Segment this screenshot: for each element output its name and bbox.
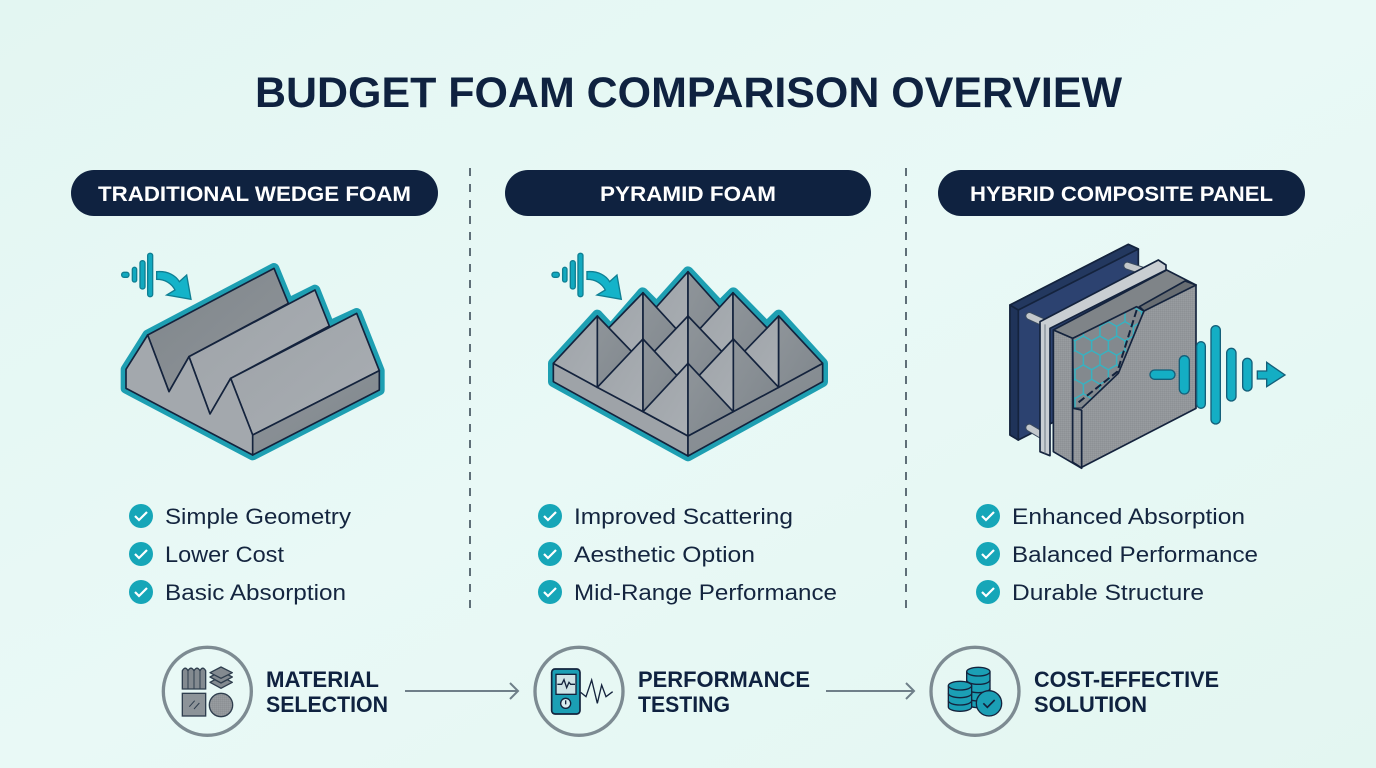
feature: balanced performance: Balanced Performance <box>1012 542 1258 567</box>
heading pill: hybrid composite panel: HYBRID COMPOSITE PANEL <box>970 183 1273 206</box>
feature: basic absorption: Basic Absorption <box>165 580 346 605</box>
panel: traditional wedge foam <box>71 170 438 605</box>
label: cost-effective solution <box>1034 667 1219 717</box>
label: cost-effective solution: COST-EFFECTIVE <box>1034 667 1219 692</box>
heading pill: pyramid foam: PYRAMID FOAM <box>600 183 776 206</box>
label: material selection <box>266 667 388 717</box>
arrow: testing to cost <box>826 683 914 699</box>
heading pill: traditional wedge foam: TRADITIONAL WEDGE FOAM <box>98 183 411 206</box>
feature: simple geometry: Simple Geometry <box>165 504 351 529</box>
feature: aesthetic option: Aesthetic Option <box>574 542 755 567</box>
label: performance testing: TESTING <box>638 692 730 717</box>
illustration: wedge foam <box>126 268 379 455</box>
heading pill: hybrid composite panel <box>938 170 1305 216</box>
label: performance testing <box>638 667 810 717</box>
feature: enhanced absorption: Enhanced Absorption <box>1012 504 1245 529</box>
panel: hybrid composite panel <box>938 170 1305 605</box>
label: performance testing: PERFORMANCE <box>638 667 810 692</box>
arrow: material to testing <box>405 683 518 699</box>
feature list <box>538 504 837 605</box>
feature: lower cost: Lower Cost <box>165 542 284 567</box>
illustration: pyramid foam <box>553 272 823 456</box>
panel: pyramid foam <box>505 170 871 605</box>
icon: outgoing sound wave arrow <box>1150 326 1285 424</box>
icon: material samples <box>163 647 251 735</box>
feature list <box>976 504 1258 605</box>
feature: durable structure: Durable Structure <box>1012 580 1204 605</box>
step: performance testing <box>535 647 810 735</box>
icon: incoming sound wave arrow <box>552 253 621 299</box>
feature: improved scattering: Improved Scattering <box>574 504 793 529</box>
feature: mid-range performance: Mid-Range Performance <box>574 580 837 605</box>
step: cost-effective solution <box>931 647 1219 735</box>
label: material selection: SELECTION <box>266 692 388 717</box>
label: cost-effective solution: SOLUTION <box>1034 692 1147 717</box>
illustration: hybrid composite panel <box>1010 244 1196 468</box>
icon: coin stacks with check <box>931 647 1019 735</box>
heading pill: traditional wedge foam <box>71 170 438 216</box>
title: BUDGET FOAM COMPARISON OVERVIEW <box>255 69 1122 117</box>
feature list <box>129 504 351 605</box>
step: material selection <box>163 647 388 735</box>
column divider <box>905 168 907 610</box>
column divider <box>469 168 471 610</box>
label: material selection: MATERIAL <box>266 667 379 692</box>
icon: measurement device <box>535 647 623 735</box>
icon: incoming sound wave arrow <box>122 253 191 299</box>
heading pill: pyramid foam <box>505 170 871 216</box>
